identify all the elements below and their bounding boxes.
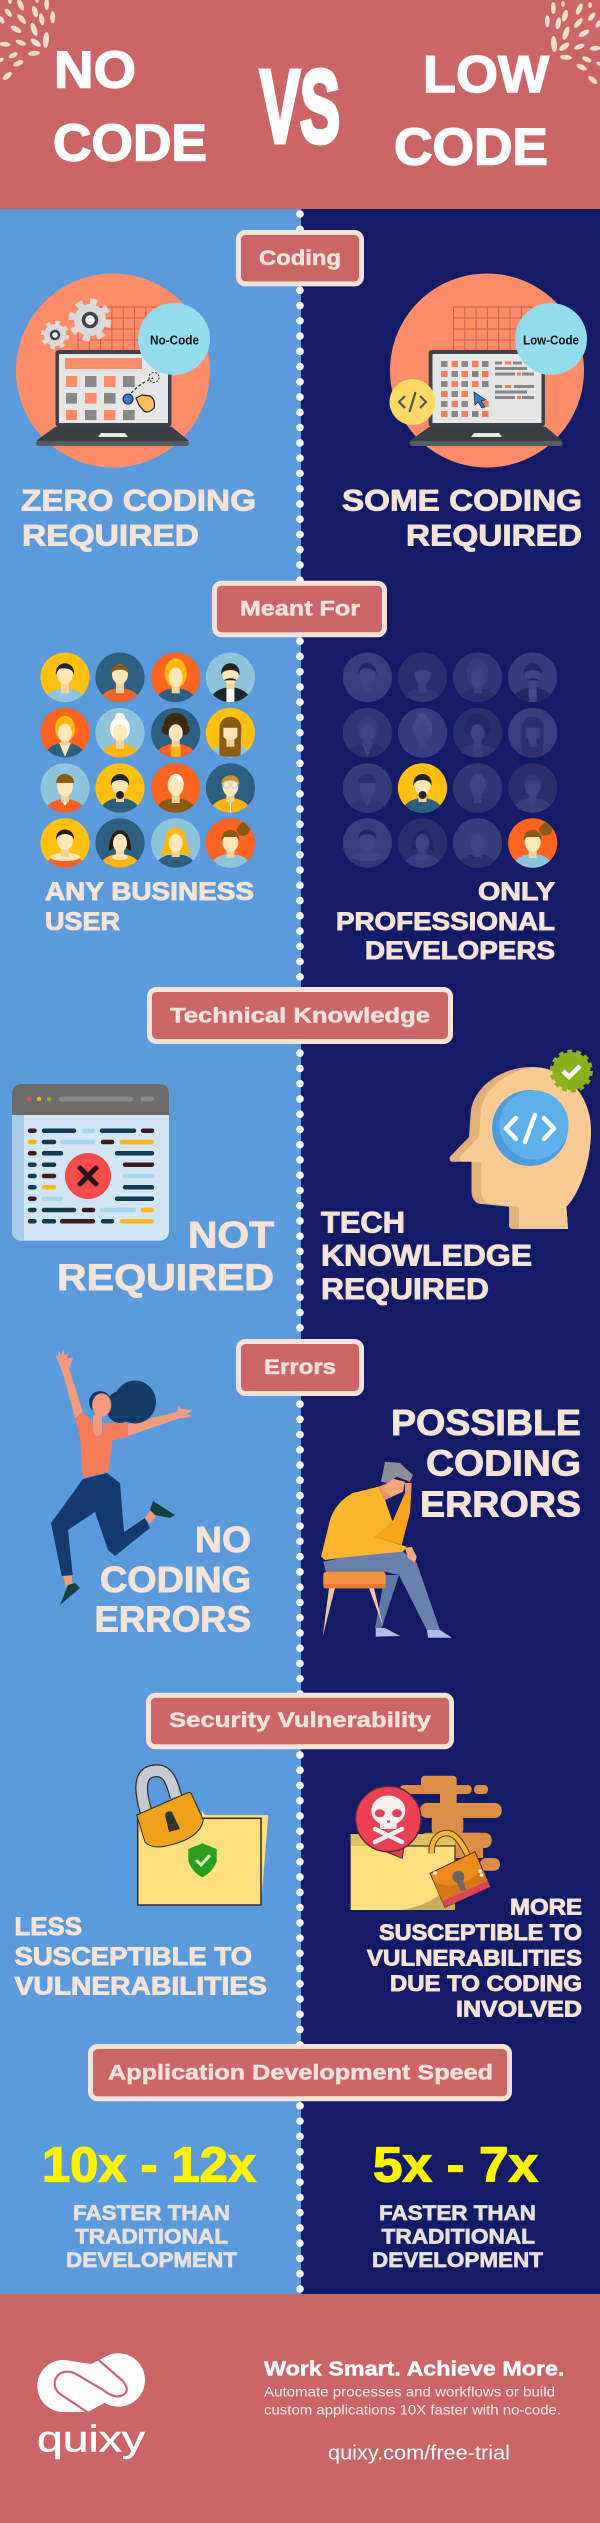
text: tech knowledge required: TECH (321, 1206, 405, 1239)
illustration: worried man on stool (321, 1462, 452, 1638)
text: only professional developers (336, 878, 555, 965)
text: more susceptible: INVOLVED (456, 1997, 582, 2022)
label: security vulnerability: Security Vulnerability (169, 1709, 431, 1732)
label: coding: Coding (259, 247, 341, 270)
sweater (321, 1487, 407, 1560)
lock body (137, 1793, 203, 1847)
label: technical knowledge: Technical Knowledge (170, 1005, 430, 1028)
text: tech knowledge required (321, 1206, 532, 1306)
text: less susceptible (14, 1913, 267, 2000)
icon: big gear (72, 302, 108, 338)
title: low code (394, 46, 550, 176)
label: technical knowledge (150, 990, 450, 1042)
text: more susceptible: SUSCEPTIBLE TO (379, 1920, 582, 1945)
badge: code brackets (390, 379, 436, 425)
icon: head with code (450, 1050, 593, 1229)
laptop base (410, 427, 562, 441)
text: faster right: DEVELOPMENT (372, 2249, 543, 2272)
pants (51, 1473, 150, 1576)
back leg (375, 1575, 399, 1628)
text: any business user (45, 878, 254, 936)
shoes (60, 1583, 80, 1605)
text: description (264, 2385, 561, 2418)
text: less susceptible: LESS (14, 1913, 82, 1941)
text: less susceptible: VULNERABILITIES (14, 1972, 267, 2000)
open lock body (430, 1852, 490, 1907)
illustration: no-code laptop (16, 274, 210, 468)
icon: small gear (43, 323, 67, 347)
text: possible coding errors: CODING (426, 1443, 581, 1484)
text: no coding errors: NO (195, 1519, 251, 1560)
glitch cloud (400, 1776, 502, 1871)
pants (323, 1552, 440, 1630)
text: faster left (66, 2202, 237, 2272)
laptop screen (429, 350, 545, 427)
text: faster right: FASTER THAN (379, 2202, 536, 2225)
text: no coding errors: CODING (100, 1559, 251, 1600)
text: any business user: ANY BUSINESS (45, 878, 254, 906)
text: only professional developers: ONLY (478, 878, 555, 906)
label: meant for: Meant For (240, 597, 360, 620)
shoes (376, 1628, 400, 1637)
text: faster right: TRADITIONAL (382, 2225, 535, 2248)
text: more susceptible: DUE TO CODING (390, 1971, 582, 1996)
drag gesture (128, 378, 153, 397)
text: zero coding required (21, 485, 256, 552)
text: faster left: DEVELOPMENT (66, 2249, 237, 2272)
hand on knee (405, 1547, 417, 1563)
text: no coding errors (94, 1519, 251, 1640)
badge: low-code: Low-Code (523, 334, 579, 348)
neck (378, 1483, 392, 1500)
badge: no-code: No-Code (150, 334, 199, 348)
logo: quixy (37, 2353, 146, 2460)
text: url: quixy.com/free-trial (328, 2442, 510, 2464)
title: no code: CODE (53, 115, 207, 173)
text: faster left: FASTER THAN (73, 2202, 230, 2225)
text: possible coding errors: POSSIBLE (391, 1402, 581, 1443)
avatars: any business user (39, 651, 256, 880)
text: some coding required: REQUIRED (406, 519, 582, 552)
laptop screen (56, 350, 172, 427)
stat: 5x - 7x: 5x - 7x (373, 2139, 538, 2193)
raised arm (62, 1368, 83, 1418)
skull pin (356, 1786, 421, 1858)
text: tech knowledge required: KNOWLEDGE (321, 1240, 532, 1273)
text: description: custom applications 10X faster with no-code. (264, 2403, 561, 2418)
shield (188, 1843, 217, 1877)
label: meant for (214, 583, 384, 635)
right navy panel (301, 209, 600, 2294)
text: more susceptible: MORE (510, 1894, 582, 1919)
header (0, 0, 600, 209)
ankles (63, 1511, 157, 1587)
icon: code window with error (12, 1084, 169, 1241)
label: coding (238, 232, 362, 284)
badge: no-code (138, 303, 210, 375)
title: no code: NO (54, 42, 136, 100)
text: some coding required: SOME CODING (342, 485, 582, 518)
text: no coding errors: ERRORS (94, 1599, 251, 1640)
text: not required: REQUIRED (57, 1257, 274, 1298)
face (383, 1478, 405, 1497)
text: tech knowledge required: REQUIRED (321, 1273, 489, 1306)
text: possible coding errors (391, 1402, 581, 1525)
text: only professional developers: DEVELOPERS (365, 937, 555, 965)
text: any business user: USER (45, 908, 120, 936)
icon: breached folder (351, 1776, 502, 1910)
illustration: jumping woman (51, 1349, 193, 1605)
text: zero coding required: ZERO CODING (21, 485, 256, 518)
dotted center divider (296, 214, 304, 2290)
hair (381, 1462, 413, 1483)
face (92, 1393, 111, 1417)
text: some coding required (342, 485, 582, 552)
text: only professional developers: PROFESSIONAL (336, 908, 555, 936)
footer (0, 2294, 600, 2523)
hair (89, 1391, 111, 1413)
text: description: Automate processes and workflows or build (264, 2385, 555, 2400)
title: low code: LOW (423, 46, 550, 104)
text: not required (57, 1215, 274, 1298)
icon: locked folder (137, 1771, 268, 1905)
text: more susceptible: VULNERABILITIES (367, 1946, 582, 1971)
text: possible coding errors: ERRORS (420, 1484, 581, 1525)
left blue panel (0, 209, 301, 2294)
text: tagline: Work Smart. Achieve More. (264, 2359, 564, 2381)
avatars: professional developers highlighted (341, 651, 559, 880)
label: errors (238, 1342, 362, 1394)
open lock shackle (432, 1833, 468, 1856)
label: application development speed: Application Development Speed (108, 2061, 493, 2084)
text: more susceptible (367, 1894, 582, 2022)
laptop base (36, 427, 189, 441)
stat: 10x - 12x: 10x - 12x (42, 2139, 256, 2193)
text: faster right (372, 2202, 543, 2272)
title: low code: CODE (394, 118, 548, 176)
shirt (75, 1413, 128, 1478)
stool legs (323, 1588, 383, 1637)
shackle (142, 1771, 176, 1812)
badge: check (551, 1051, 591, 1091)
text: zero coding required: REQUIRED (22, 519, 199, 552)
text: not required: NOT (188, 1215, 274, 1256)
hand on head (405, 1483, 412, 1497)
logo: quixy: quixy (37, 2419, 146, 2460)
label: errors: Errors (264, 1356, 336, 1379)
text: faster left: TRADITIONAL (75, 2225, 228, 2248)
outstretched arm (127, 1405, 193, 1436)
title: vs: VS (260, 49, 340, 164)
illustration: low-code laptop (390, 274, 587, 468)
stool seat (323, 1572, 386, 1588)
label: application development speed (90, 2046, 510, 2099)
label: security vulnerability (148, 1695, 452, 1747)
title: no code (53, 42, 207, 173)
folder (351, 1834, 455, 1910)
badge: low-code (515, 303, 587, 375)
text: less susceptible: SUSCEPTIBLE TO (14, 1943, 252, 1971)
